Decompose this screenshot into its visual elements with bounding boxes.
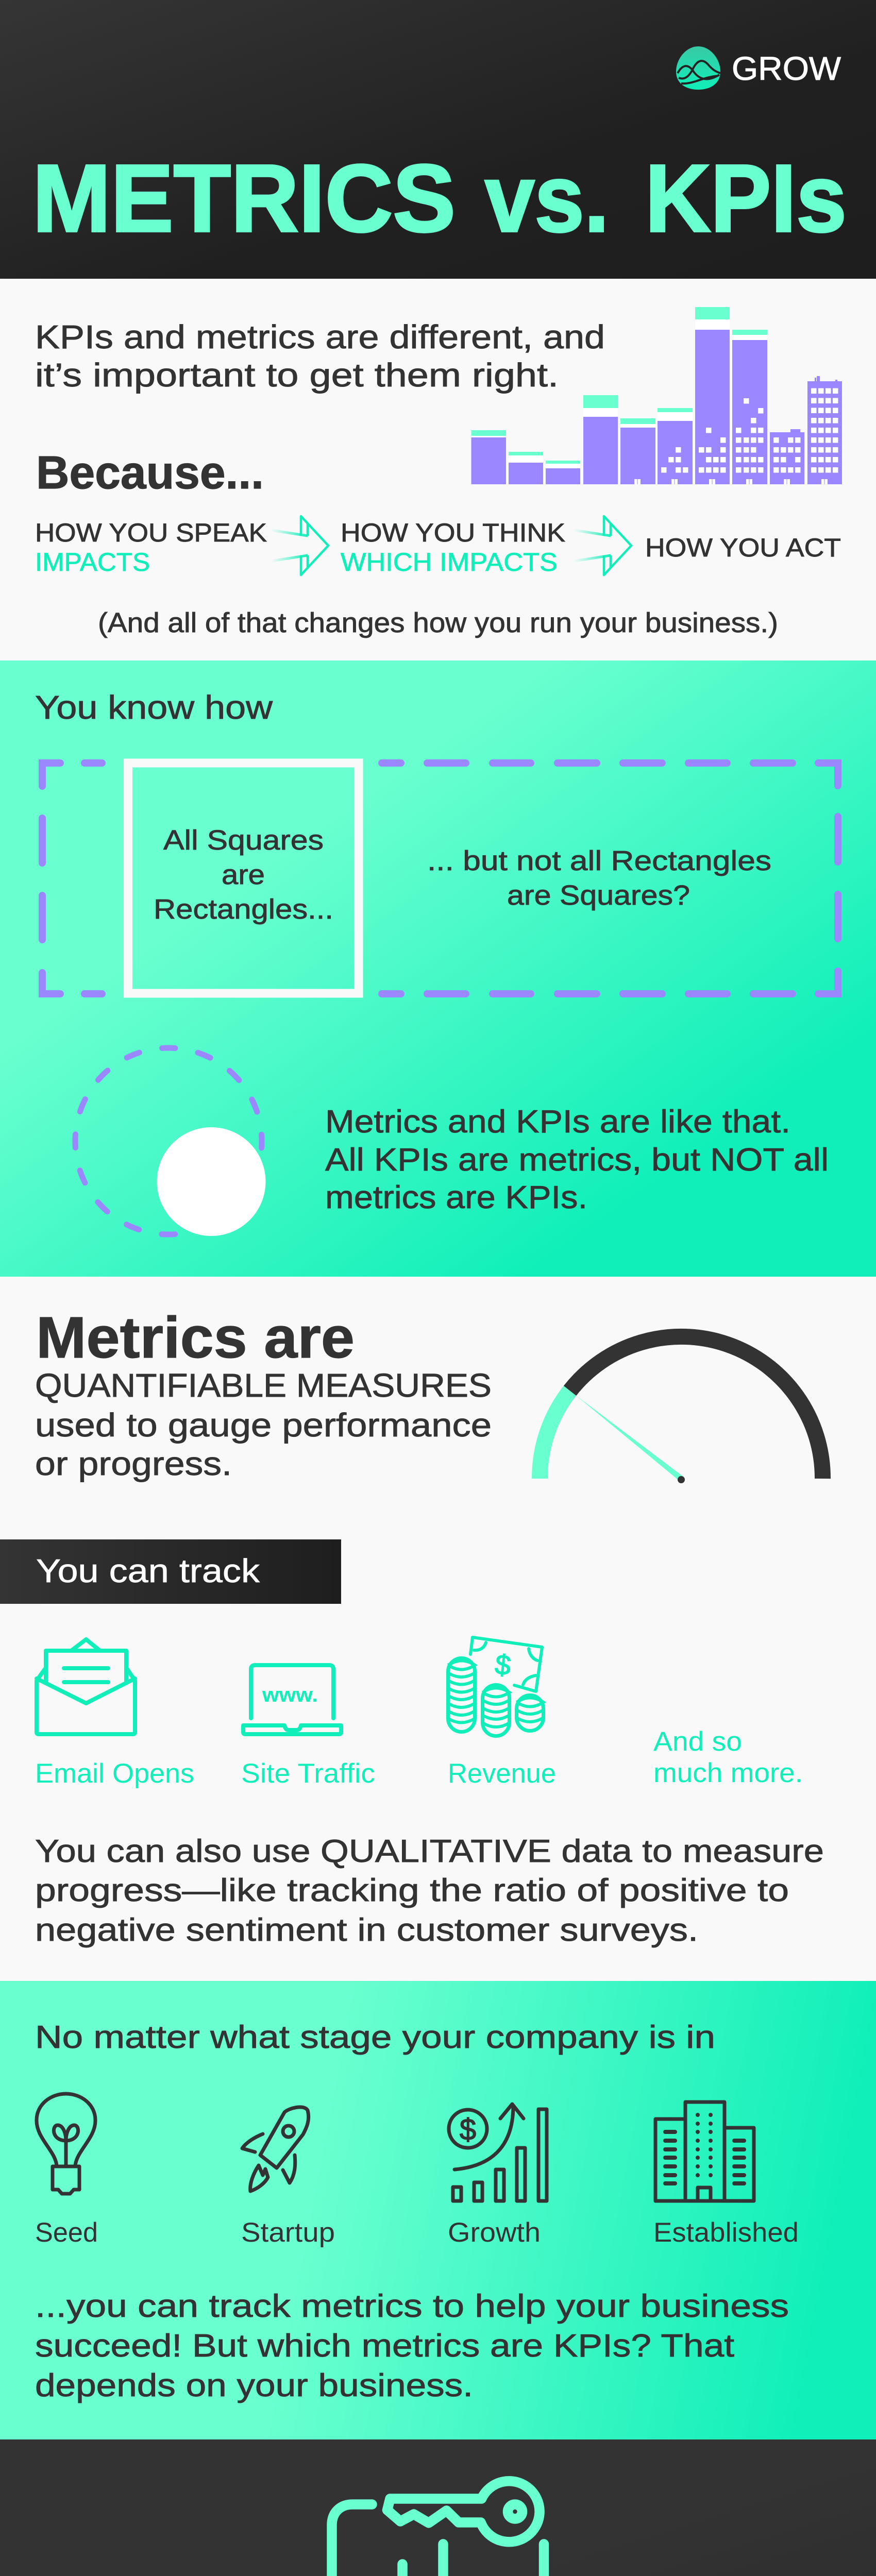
stages body text: succeed! But which metrics are KPIs? That (35, 2328, 734, 2364)
banner: you can track (0, 1539, 341, 1604)
title (32, 145, 847, 252)
heading: Metrics are: Metrics are (36, 1305, 355, 1370)
panel: intro (35, 307, 842, 638)
icon labels: much more. (653, 1758, 803, 1788)
icon: growth chart (449, 2104, 547, 2201)
icon labels: Revenue (448, 1758, 556, 1789)
stage labels (35, 2217, 799, 2248)
stages body text: depends on your business. (35, 2368, 473, 2403)
panel: header (0, 0, 876, 279)
dashed rectangle (42, 763, 838, 994)
logo: Grow: GROW (732, 50, 841, 87)
definition text (35, 1367, 492, 1482)
icon: laptop (243, 1665, 341, 1734)
icon: laptop: www. (262, 1684, 318, 1706)
intro text: it’s important to get them right. (35, 357, 559, 394)
flow: how you think: HOW YOU THINK (341, 518, 565, 547)
definition text: used to gauge performance (35, 1406, 492, 1444)
flow: how you speak (35, 518, 267, 577)
qualitative text: progress—like tracking the ratio of positive to (35, 1873, 789, 1908)
icon: key over chart (332, 2481, 544, 2576)
title: KPIs (645, 145, 847, 252)
panel: company stages (0, 1981, 876, 2439)
stage labels: Startup (241, 2217, 335, 2248)
definition text: or progress. (35, 1445, 232, 1482)
banner: you can track: You can track (36, 1552, 260, 1589)
arrow 2 (574, 516, 631, 575)
flow: how you speak: IMPACTS (35, 548, 150, 577)
rectangle text: are Squares? (507, 880, 690, 911)
qualitative text: You can also use QUALITATIVE data to measure (35, 1834, 824, 1869)
stages body text (35, 2289, 789, 2403)
logo: Grow (676, 46, 841, 90)
stage labels: Seed (35, 2217, 98, 2248)
qualitative text: negative sentiment in customer surveys. (35, 1912, 698, 1948)
flow: how you act: HOW YOU ACT (645, 533, 841, 562)
gauge chart (540, 1336, 823, 1483)
icon: revenue (448, 1637, 543, 1736)
icon labels (35, 1726, 803, 1789)
panel: KPI definition (0, 2439, 876, 2576)
icon: startup rocket (242, 2107, 309, 2191)
title: vs. (485, 145, 609, 252)
intro text (35, 318, 605, 394)
flow: how you think (341, 518, 565, 577)
icon: email (37, 1639, 135, 1734)
icon labels: Email Opens (35, 1758, 194, 1789)
analogy text (325, 1104, 829, 1215)
skyline bar chart (471, 307, 842, 484)
analogy text: metrics are KPIs. (325, 1180, 587, 1215)
icon labels: And so (653, 1726, 742, 1757)
white circle (157, 1127, 266, 1236)
stage labels: Growth (448, 2217, 541, 2248)
square text (154, 825, 333, 925)
stages heading: No matter what stage your company is in (35, 2020, 715, 2055)
lead-in text: You know how (35, 689, 273, 726)
qualitative text (35, 1834, 824, 1948)
panel: metrics definition (0, 1305, 831, 1948)
definition text: QUANTIFIABLE MEASURES (35, 1367, 492, 1404)
stage labels: Established (653, 2217, 799, 2248)
dashed circle (75, 1048, 262, 1234)
square text: Rectangles... (154, 894, 333, 925)
closing note: (And all of that changes how you run your business.) (98, 607, 778, 638)
title: METRICS (32, 145, 456, 252)
icon: revenue: $ (494, 1649, 512, 1681)
icon: seed bulb (37, 2094, 95, 2194)
stages body text: ...you can track metrics to help your business (35, 2289, 789, 2324)
heading: Because: Because... (36, 447, 264, 499)
icon: established buildings (655, 2102, 754, 2201)
square text: All Squares (163, 825, 324, 856)
rectangle text (427, 845, 771, 911)
flow: how you speak: HOW YOU SPEAK (35, 518, 267, 547)
arrow 1 (271, 516, 328, 575)
flow: how you think: WHICH IMPACTS (341, 548, 558, 577)
icon labels: Site Traffic (241, 1758, 375, 1789)
panel: squares and rectangles (0, 660, 876, 1277)
rectangle text: ... but not all Rectangles (427, 845, 771, 876)
white square (128, 763, 359, 993)
intro text: KPIs and metrics are different, and (35, 318, 605, 355)
square text: are (222, 859, 265, 890)
icon: growth chart: $ (460, 2113, 476, 2146)
analogy text: Metrics and KPIs are like that. (325, 1104, 790, 1140)
analogy text: All KPIs are metrics, but NOT all (325, 1142, 829, 1178)
